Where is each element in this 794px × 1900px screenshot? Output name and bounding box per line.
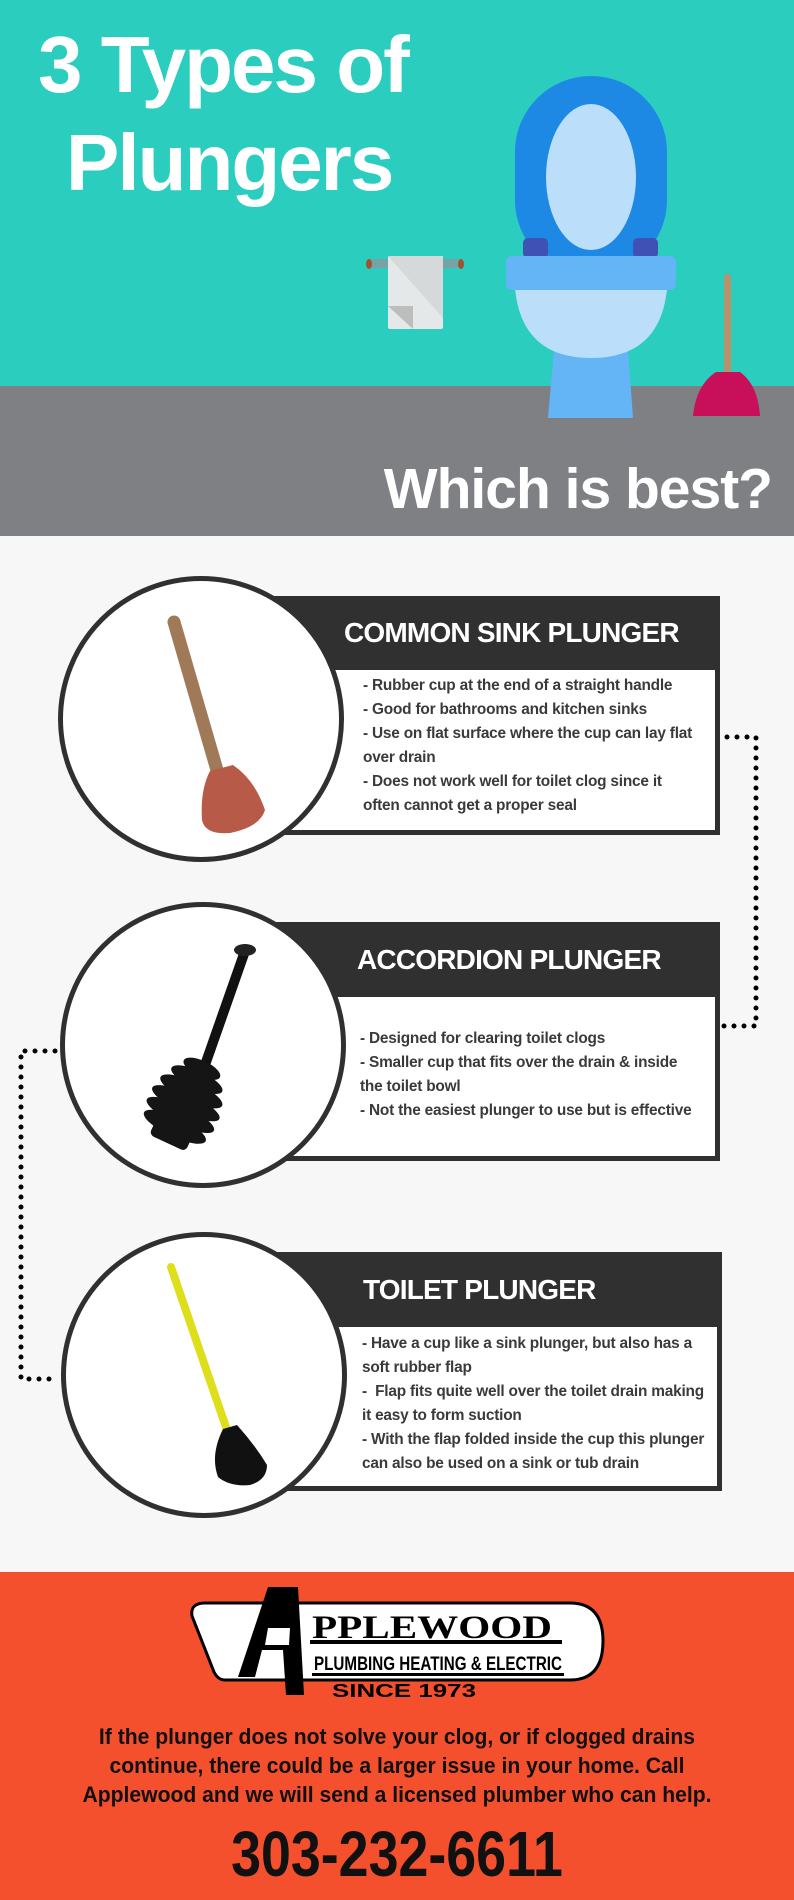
icon: toilet plunger in circle bbox=[61, 1232, 347, 1518]
header band: teal bbox=[0, 0, 794, 386]
footer: orange band bbox=[0, 1572, 794, 1900]
footer text: call to action: continue, there could be a larger issue in your home. Call bbox=[109, 1753, 685, 1778]
panel: toilet plunger bbox=[61, 1232, 722, 1518]
panel text: sink plunger facts bbox=[270, 670, 720, 835]
header band: gray floor bbox=[0, 386, 794, 536]
connector: dotted right bbox=[722, 734, 758, 1028]
panel: common sink plunger bbox=[58, 576, 720, 862]
logo: Applewood: PPLEWOOD bbox=[312, 1610, 552, 1646]
footer: phone number: 303-232-6611 bbox=[231, 1818, 563, 1890]
panel text: toilet plunger facts: - Flap fits quite well over the toilet drain making bbox=[362, 1383, 704, 1400]
panel text: toilet plunger facts: soft rubber flap bbox=[362, 1359, 472, 1376]
panel text: accordion facts: the toilet bowl bbox=[360, 1078, 460, 1095]
panel header: ACCORDION PLUNGER bbox=[274, 922, 720, 997]
icon: accordion plunger in circle bbox=[60, 902, 346, 1188]
panel text: toilet plunger facts: - With the flap folded inside the cup this plunger bbox=[362, 1431, 704, 1448]
panel header: ACCORDION PLUNGER: ACCORDION PLUNGER bbox=[357, 944, 661, 974]
panel text: sink plunger facts: over drain bbox=[363, 749, 435, 766]
illustration: small red plunger bbox=[693, 274, 760, 416]
panel text: toilet plunger facts bbox=[276, 1327, 722, 1491]
icon: sink plunger in circle bbox=[58, 576, 344, 862]
panel text: toilet plunger facts: - Have a cup like a sink plunger, but also has a bbox=[362, 1335, 692, 1352]
panel text: accordion facts bbox=[274, 997, 720, 1161]
footer text: call to action: Applewood and we will send a licensed plumber who can help. bbox=[82, 1782, 712, 1807]
panel: accordion plunger bbox=[60, 902, 720, 1188]
title bbox=[38, 20, 410, 207]
panel text: toilet plunger facts: it easy to form suction bbox=[362, 1407, 522, 1424]
illustration: toilet paper bbox=[366, 256, 464, 329]
illustration: toilet bbox=[506, 76, 676, 418]
title: Plungers bbox=[66, 118, 392, 207]
footer text: call to action: If the plunger does not solve your clog, or if clogged drains bbox=[99, 1724, 695, 1749]
panel header: TOILET PLUNGER bbox=[276, 1252, 722, 1327]
panel text: sink plunger facts: - Good for bathrooms and kitchen sinks bbox=[363, 701, 647, 718]
panel header: COMMON SINK PLUNGER: COMMON SINK PLUNGER bbox=[344, 617, 679, 648]
footer text: call to action bbox=[82, 1724, 712, 1807]
logo: Applewood bbox=[190, 1587, 604, 1700]
panel header: COMMON SINK PLUNGER bbox=[270, 596, 720, 670]
panel text: accordion facts: - Smaller cup that fits over the drain & inside bbox=[360, 1054, 677, 1071]
panel text: sink plunger facts: - Does not work well for toilet clog since it bbox=[363, 773, 662, 790]
panel header: TOILET PLUNGER: TOILET PLUNGER bbox=[363, 1274, 596, 1304]
title: 3 Types of bbox=[38, 20, 408, 109]
panel text: sink plunger facts: often cannot get a proper seal bbox=[363, 797, 577, 814]
panel text: toilet plunger facts: can also be used on a sink or tub drain bbox=[362, 1455, 639, 1472]
subtitle: Which is best?: Which is best? bbox=[384, 457, 772, 521]
panel text: accordion facts: - Designed for clearing toilet clogs bbox=[360, 1030, 605, 1047]
panel text: sink plunger facts: - Use on flat surface where the cup can lay flat bbox=[363, 725, 692, 742]
panel text: accordion facts: - Not the easiest plunger to use but is effective bbox=[360, 1102, 691, 1119]
panel text: sink plunger facts: - Rubber cup at the end of a straight handle bbox=[363, 677, 672, 694]
connector: dotted left bbox=[18, 1048, 58, 1382]
